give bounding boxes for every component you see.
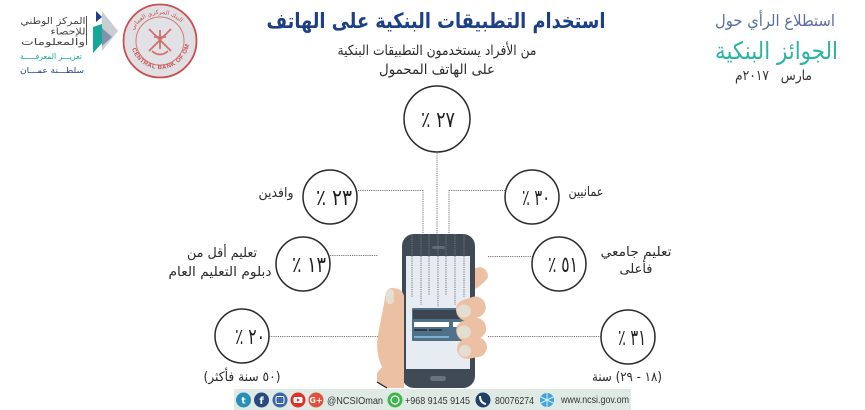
icon: facebook <box>254 392 269 408</box>
logo: statistics centre: للإحصاء <box>50 26 86 38</box>
stat: university or higher 51%: تعليم جامعي <box>600 245 672 260</box>
logo: central bank of oman seal: البنك المركزي العماني <box>132 9 184 30</box>
icon: instagram <box>272 392 288 408</box>
stat: all individuals 27%: ٢٧ ٪ <box>421 108 455 133</box>
icon: phone <box>476 392 490 408</box>
stat: below general diploma 13%: دبلوم التعليم العام <box>168 265 272 280</box>
stat: 18 to 29 years 31%: (١٨ - ٢٩) سنة <box>592 370 662 385</box>
stat: all individuals 27% <box>404 86 470 152</box>
logo: statistics centre: سلطـــنة عمـــان <box>20 66 84 75</box>
whatsapp number: +968 9145 9145 <box>405 395 470 407</box>
icon: google plus <box>308 392 324 408</box>
stat: 50 years and over 20% <box>204 309 280 385</box>
stat: expatriates 23%: ٢٣ ٪ <box>316 186 352 211</box>
icon: facebook: f <box>259 396 264 407</box>
stat: 50 years and over 20%: (٥٠ سنة فأكثر) <box>204 367 280 385</box>
bank card <box>412 308 468 341</box>
stat: 50 years and over 20%: ٢٠ ٪ <box>235 325 265 350</box>
icon: whatsapp <box>388 392 402 408</box>
survey heading: استطلاع الرأي حول <box>715 10 835 31</box>
icon: twitter: t <box>241 396 246 406</box>
icon: twitter <box>236 392 251 408</box>
stat: university or higher 51%: ٥١ ٪ <box>548 253 578 278</box>
stat: expatriates 23% <box>258 170 357 224</box>
survey heading: مارس ٢٠١٧م <box>735 68 812 84</box>
stat: 18 to 29 years 31%: ٣١ ٪ <box>618 326 646 351</box>
twitter handle: @NCSIOman <box>327 395 383 407</box>
back finger behind phone <box>475 267 488 289</box>
stat: omanis 30% <box>505 170 604 224</box>
stat: university or higher 51%: فأعلى <box>620 259 652 277</box>
logo: statistics centre: والمعلومات <box>21 37 85 48</box>
icon: youtube <box>290 392 306 408</box>
footer contact bar <box>234 389 631 410</box>
subtitle: من الأفراد يستخدمون التطبيقات البنكية <box>338 41 536 59</box>
stat: omanis 30%: ٣٠ ٪ <box>522 186 550 211</box>
stat: 18 to 29 years 31% <box>592 310 662 385</box>
title: استخدام التطبيقات البنكية على الهاتف <box>266 9 606 33</box>
subtitle: على الهاتف المحمول <box>379 62 495 78</box>
phone screen lines <box>412 234 464 307</box>
stat: below general diploma 13%: ١٣ ٪ <box>292 253 326 278</box>
phone <box>402 234 475 388</box>
logo: statistics centre: المركز الوطني <box>20 16 86 27</box>
subtitle <box>338 41 536 78</box>
icon: website globe <box>540 393 554 407</box>
survey heading <box>715 10 838 84</box>
survey heading: الجوائز البنكية <box>715 37 838 65</box>
logo: statistics centre: تعزيـــز المعرفـــــة <box>20 52 82 61</box>
stat: below general diploma 13% <box>168 237 330 291</box>
stat: below general diploma 13%: تعليم أقل من <box>187 244 257 261</box>
stat: omanis 30%: عمانيين <box>568 185 604 200</box>
logo: central bank of oman seal <box>122 4 198 78</box>
icon: google plus: G+ <box>309 396 323 405</box>
stat: university or higher 51% <box>532 237 672 291</box>
logo: statistics centre <box>20 11 118 75</box>
website url: www.ncsi.gov.om <box>560 394 629 406</box>
phone number: 80076274 <box>495 395 534 407</box>
hand holding phone <box>377 288 489 388</box>
connector lines <box>269 153 601 336</box>
stat: expatriates 23%: وافدين <box>258 186 294 201</box>
